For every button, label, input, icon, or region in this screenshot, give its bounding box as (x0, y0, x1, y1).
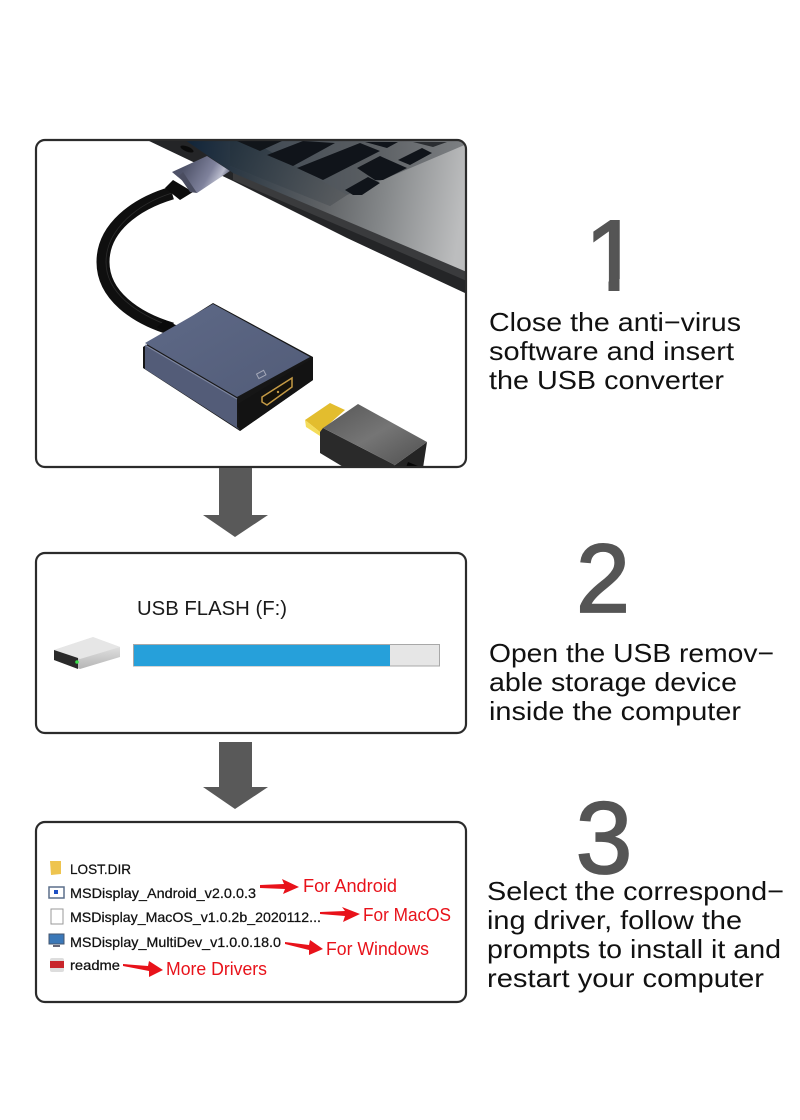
step number 3: 3 (576, 781, 632, 895)
step number 2: 2 (576, 524, 630, 633)
text: step 3 instructions: Select the correspond− (487, 876, 784, 906)
text: step 1 instructions: Close the anti−virus (489, 307, 741, 337)
file name: LOST.DIR: LOST.DIR (70, 861, 131, 877)
panel: step 1 product photo (36, 140, 467, 470)
text: step 1 instructions: software and insert (489, 336, 735, 366)
text: step 3 instructions: restart your computer (487, 963, 764, 993)
label: More Drivers: More Drivers (166, 959, 267, 979)
text: step 2 instructions: able storage device (489, 667, 737, 697)
icon: Android file (49, 887, 64, 898)
label: For Android: For Android (303, 876, 397, 896)
icon: drive (54, 637, 120, 669)
HDMI adapter box (143, 303, 313, 431)
text: step 3 instructions: prompts to install it and (487, 934, 781, 964)
text: step 1 instructions (489, 307, 741, 395)
icon: folder (50, 861, 61, 875)
file name: MacOS: MSDisplay_MacOS_v1.0.2b_2020112... (70, 909, 321, 925)
text: step 3 instructions (487, 876, 784, 993)
file name: Windows: MSDisplay_MultiDev_v1.0.0.18.0 (70, 934, 281, 950)
arrow: Windows (285, 940, 323, 955)
file name: readme: readme (70, 957, 120, 973)
icon: Mac file (51, 909, 63, 924)
USB plug and cable (103, 156, 230, 334)
laptop (147, 140, 467, 294)
capacity bar (134, 644, 440, 666)
arrow: MacOS (320, 907, 360, 922)
text: step 2 instructions (489, 638, 774, 726)
icon: Windows display (49, 934, 64, 947)
label: For MacOS: For MacOS (363, 905, 451, 925)
panel: step 2 storage drive (36, 553, 466, 733)
text: step 2 instructions: inside the computer (489, 696, 741, 726)
file name: Android: MSDisplay_Android_v2.0.0.3 (70, 885, 256, 901)
label: USB FLASH: USB FLASH (F:) (137, 598, 287, 620)
label: For Windows: For Windows (326, 939, 429, 959)
arrow: step 2 to step 3 (203, 742, 268, 809)
arrow: step 1 to step 2 (203, 468, 268, 537)
HDMI plug (305, 403, 428, 470)
text: step 1 instructions: the USB converter (489, 365, 724, 395)
text: step 3 instructions: ing driver, follow the (487, 905, 742, 935)
text: step 2 instructions: Open the USB remov− (489, 638, 774, 668)
arrow: More Drivers (123, 961, 163, 977)
icon: PDF (50, 958, 64, 972)
step number 1: 1 (585, 200, 640, 312)
arrow: Android (260, 879, 299, 894)
panel: step 3 driver files (36, 822, 466, 1002)
